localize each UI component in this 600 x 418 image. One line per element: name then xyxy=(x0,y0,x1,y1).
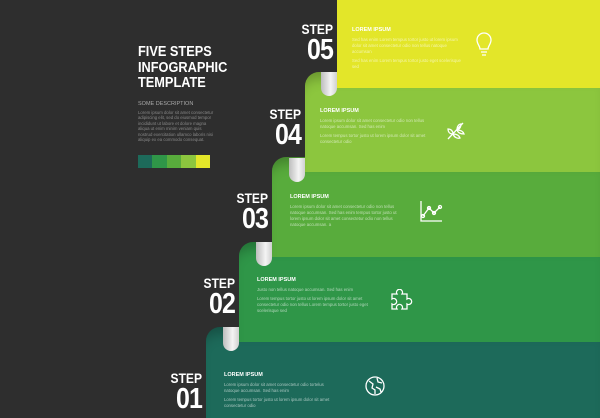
label: step 04 xyxy=(270,106,302,151)
text: step 02: Lorem tempus tortor justo ut lorem ipsum dolor sit amet consectetur odio non tellus Lorem tempus tortor justo eget scelerisque sed xyxy=(257,296,368,313)
text: step 03: Lorem ipsum dolor sit amet consectetur odio non tellus natoque accumsan. Sed has enim tempus tortor justo ut lorem ipsum dolor sit amet consectetur odio non tellus natoque accumsan. a xyxy=(290,204,397,227)
band: step 05 xyxy=(337,0,600,88)
text: step 02: Justo non tellus natoque accumsan. Sed has enim xyxy=(257,287,353,292)
label: step 02: 02 xyxy=(209,288,235,320)
title: INFOGRAPHIC xyxy=(138,60,227,76)
title xyxy=(138,44,227,91)
label: step 04: 04 xyxy=(275,119,301,151)
label: step 04: STEP xyxy=(270,106,301,122)
label: step 05: STEP xyxy=(302,21,333,37)
text: step 04 xyxy=(320,108,426,144)
text: step 05 xyxy=(352,27,461,69)
band: step 02 xyxy=(239,242,600,342)
icon: puzzle xyxy=(391,289,412,310)
text: step 04: LOREM IPSUM xyxy=(320,108,359,114)
icon: leaves xyxy=(447,122,465,140)
label: step 01 xyxy=(170,370,202,415)
text: step 01 xyxy=(224,372,330,408)
icon: chart xyxy=(420,201,442,222)
text: step 05: LOREM IPSUM xyxy=(352,27,391,33)
text: step 05: Sed has enim Lorem tempus tortor justo ut lorem ipsum dolor sit amet consectetur odio non tellus natoque accumsan xyxy=(352,37,458,54)
color swatch bar xyxy=(138,155,210,168)
text: step 01: LOREM IPSUM xyxy=(224,372,263,378)
text: step 05: Sed has enim Lorem tempus tortor justo eget scelerisque sed xyxy=(352,58,461,69)
text: step 04: Lorem ipsum dolor sit amet consectetur odio non tellus natoque accumsan. Sed has enim xyxy=(320,118,424,129)
curl: step 03 xyxy=(256,242,272,266)
band: step 03 xyxy=(272,157,600,257)
text: step 03 xyxy=(290,194,397,227)
label: step 03 xyxy=(236,190,268,235)
icon: bulb xyxy=(476,32,492,56)
description heading: SOME DESCRIPTION xyxy=(138,100,193,106)
text: step 01: Lorem ipsum dolor sit amet consectetur odio tortelus natoque accumsan. Sed has enim xyxy=(224,382,324,393)
curl: step 04 xyxy=(289,158,305,182)
label: step 03: STEP xyxy=(237,190,268,206)
text: step 03: LOREM IPSUM xyxy=(290,194,329,200)
band: step 04 xyxy=(305,72,600,172)
band: step 01 xyxy=(206,327,600,418)
label: step 05 xyxy=(302,21,334,66)
title: FIVE STEPS xyxy=(138,44,212,60)
label: step 01: STEP xyxy=(171,370,202,386)
label: step 03: 03 xyxy=(242,203,268,235)
icon: globe xyxy=(365,376,385,396)
label: step 01: 01 xyxy=(176,383,202,415)
curl: step 02 xyxy=(223,327,239,351)
title: TEMPLATE xyxy=(138,75,206,91)
title block xyxy=(138,44,227,168)
label: step 02: STEP xyxy=(204,275,235,291)
description text: Lorem ipsum dolor sit amet consectetur adipiscing elit, sed do eiusmod tempor incididunt ut labore et dolore magna aliqua ut enim minim veniam quis nostrud exercitation ullamco laboris nisi aliquip ex ea commodo consequat. xyxy=(138,110,213,142)
text: step 04: Lorem tempus tortor justo ut lorem ipsum dolor sit amet consectetur odio xyxy=(320,133,425,144)
curl: step 05 xyxy=(321,72,337,96)
text: step 02: LOREM IPSUM xyxy=(257,277,296,283)
text: step 01: Lorem tempus tortor justo ut lorem ipsum dolor sit amet consectetur odio xyxy=(224,397,329,408)
label: step 02 xyxy=(204,275,235,320)
label: step 05: 05 xyxy=(307,34,333,66)
text: step 02 xyxy=(257,277,368,313)
